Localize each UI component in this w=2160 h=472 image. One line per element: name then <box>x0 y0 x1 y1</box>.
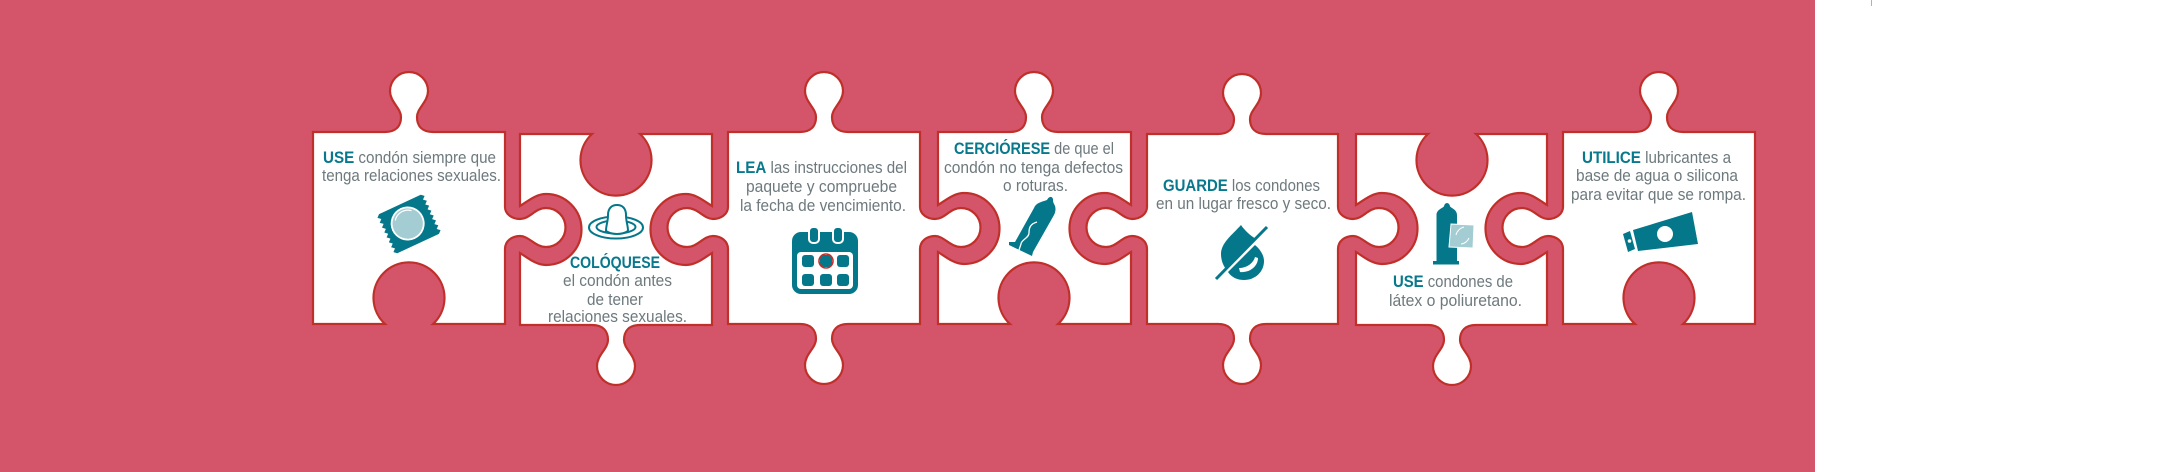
text: utilice: UTILICE lubricantes a <box>1582 149 1731 167</box>
text: coloquese: COLÓQUESE <box>570 253 660 272</box>
panel: step 1 use condom always <box>313 72 566 324</box>
panel: step 6 latex or polyurethane <box>1356 134 1547 385</box>
text: use latex: USE condones de <box>1393 273 1513 291</box>
text: utilice <box>1571 149 1746 204</box>
small top tick <box>1871 0 1872 6</box>
text: guarde <box>1156 177 1331 213</box>
puzzle piece 2 <box>520 134 712 385</box>
icon: lubricant tube <box>1623 212 1698 252</box>
puzzle piece 5 <box>1086 74 1398 384</box>
panel: step 3 read instructions <box>668 72 980 384</box>
icon: damaged condom <box>1009 197 1056 256</box>
icon: drop crossed out <box>1216 225 1267 280</box>
text: utilice: para evitar que se rompa. <box>1571 186 1746 204</box>
text: lea: LEA las instrucciones del <box>736 159 907 177</box>
puzzle piece 3 <box>668 72 980 384</box>
panel: step 5 store cool and dry <box>1086 74 1398 384</box>
text: lea: paquete y compruebe <box>746 178 897 196</box>
text: guarde: GUARDE los condones <box>1163 177 1320 195</box>
text: coloquese: relaciones sexuales. <box>548 308 687 326</box>
text: use: USE condón siempre que <box>323 149 496 167</box>
puzzle piece 7 <box>1502 72 1755 324</box>
text: use latex <box>1389 273 1522 310</box>
text: cerciorese: condón no tenga defectos <box>944 159 1123 177</box>
panel: step 2 put on condom <box>520 134 712 385</box>
text: guarde: en un lugar fresco y seco. <box>1156 195 1331 213</box>
panel: step 4 check for defects <box>938 72 1131 324</box>
text: use latex: látex o poliuretano. <box>1389 292 1522 310</box>
icon: condom and packet <box>1433 203 1474 264</box>
icon: calendar <box>792 227 858 294</box>
text: cerciorese: CERCIÓRESE de que el <box>954 139 1114 158</box>
text: cerciorese: o roturas. <box>1003 177 1068 195</box>
text: lea: la fecha de vencimiento. <box>740 197 906 215</box>
puzzle piece 6 <box>1356 134 1547 385</box>
panel: step 7 use lubricant <box>1502 72 1755 324</box>
text: use <box>322 149 501 185</box>
icon: condom packet <box>376 193 442 255</box>
icon: condom ring <box>589 205 643 238</box>
text: utilice: base de agua o silicona <box>1576 167 1738 185</box>
text: use: tenga relaciones sexuales. <box>322 167 501 185</box>
puzzle piece 1 <box>313 72 566 324</box>
text: cerciorese <box>944 139 1123 195</box>
text: coloquese: el condón antes <box>563 272 672 290</box>
text: coloquese: de tener <box>587 291 644 309</box>
text: lea <box>736 159 907 215</box>
puzzle piece 4 <box>938 72 1131 324</box>
text: coloquese <box>548 253 687 326</box>
